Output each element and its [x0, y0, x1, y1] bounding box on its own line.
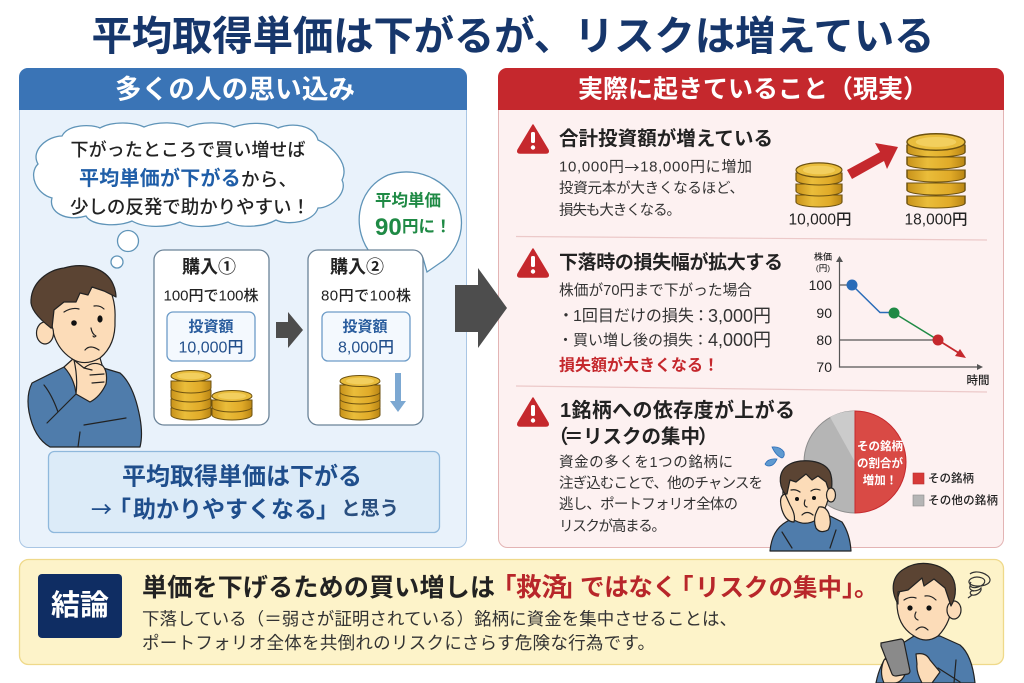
item: loss widens on decline: 損失額が大きくなる！	[559, 356, 719, 374]
conclusion heading: 「	[669, 574, 694, 602]
icon: warning triangle	[518, 125, 548, 153]
item: loss widens on decline: ：	[693, 308, 709, 324]
line chart: share price: 80	[816, 332, 832, 348]
conclusion body text: 下落している（＝弱さが証明されている）銘柄に資金を集中させることは、	[142, 609, 737, 629]
panel header: common belief: 多くの人の思い込み	[115, 74, 355, 104]
purchase 2 card: 80円で100株	[321, 288, 411, 304]
item: concentration in one stock: 逃し、ポートフォリオ全体の	[559, 496, 738, 513]
icon: worry spiral	[968, 572, 990, 598]
thought cloud: 平均単価が下がるから、	[79, 166, 297, 190]
item: loss widens on decline: ：	[693, 332, 708, 348]
conclusion heading: 「	[491, 574, 517, 602]
item: loss widens on decline: 買い増し後の損失	[573, 332, 693, 348]
item: total investment increases: 18,000円	[905, 212, 967, 228]
item: total investment increases: 10,000円→18,000円に増加	[559, 156, 752, 178]
thought cloud	[34, 123, 344, 268]
line chart: share price: 70	[816, 359, 832, 375]
conclusion heading: ではなく	[580, 574, 677, 602]
investment amount: 8,000 yen: 投資額	[342, 318, 388, 336]
line chart: share price: 100	[809, 277, 832, 293]
investment amount: 10,000 yen: 10,000円	[179, 340, 243, 356]
legend	[913, 471, 998, 507]
item: loss widens on decline	[518, 249, 990, 387]
person: thinking man	[28, 266, 142, 447]
item: loss widens on decline: ・	[558, 332, 573, 348]
conclusion badge	[38, 574, 122, 638]
speech bubble: average price 90 yen: 円に！	[402, 218, 452, 236]
conclusion body text: ポートフォリオ全体を共倒れのリスクにさらす危険な行為です。	[142, 633, 655, 653]
person: man looking at phone	[876, 563, 990, 683]
arrow: growth	[847, 143, 898, 179]
purchase 1 card	[154, 250, 269, 425]
panel header: reality	[498, 68, 1004, 110]
purchase 2 card: 購入②	[330, 257, 384, 277]
icon: warning triangle	[518, 398, 548, 426]
investment amount: 8,000 yen: 8,000円	[338, 340, 394, 356]
item: loss widens on decline: 4,000円	[708, 330, 771, 350]
conclusion heading: リスクの集中	[695, 574, 842, 602]
speech bubble: average price 90 yen	[359, 172, 461, 272]
conclusion heading	[142, 574, 878, 602]
panel: common belief	[19, 68, 467, 548]
item: concentration in one stock: ）	[698, 426, 718, 448]
line chart: share price: 時間	[966, 373, 990, 387]
item: concentration in one stock: 資金の多くを1つの銘柄に	[559, 453, 733, 471]
callout: average cost falls: 平均取得単価は下がる	[122, 462, 362, 490]
conclusion body text	[142, 609, 737, 653]
item: concentration in one stock: （	[549, 426, 569, 448]
icon: down arrow	[390, 373, 406, 412]
item: concentration in one stock: 注ぎ込むことで、他のチャンスを	[559, 475, 763, 492]
item: loss widens on decline: 3,000円	[708, 306, 771, 326]
callout: average cost falls: 助かりやすくなる	[133, 496, 317, 522]
arrow: purchase 1 to purchase 2	[276, 312, 303, 348]
item: loss widens on decline: ・	[558, 308, 574, 324]
item: concentration in one stock: 1銘柄への依存度が上がる	[560, 398, 795, 422]
investment amount: 8,000 yen	[322, 312, 410, 361]
panel: conclusion	[20, 560, 1004, 683]
purchase 2 card	[308, 250, 423, 425]
item: loss widens on decline: 株価が70円まで下がった場合	[559, 282, 752, 299]
conclusion heading: 単価を下げるための買い増しは	[142, 574, 495, 602]
item: total investment increases: 損失も大きくなる。	[559, 202, 681, 219]
conclusion heading: 」	[562, 574, 588, 602]
thought cloud: 少しの反発で助かりやすい！	[70, 196, 310, 218]
callout: average cost falls: 」	[316, 496, 339, 522]
item: concentration in one stock	[518, 398, 998, 551]
thought cloud: 下がったところで買い増せば	[70, 139, 306, 160]
speech bubble: average price 90 yen: 90	[375, 214, 402, 240]
item: loss widens on decline: 1回目だけの損失	[573, 306, 694, 324]
icon: coin stacks	[171, 370, 252, 420]
line chart: share price: 90	[816, 305, 832, 321]
item: total investment increases: 投資元本が大きくなるほど、	[559, 180, 744, 197]
callout: average cost falls: 「	[108, 496, 131, 522]
pie chart: holding share: 増加！	[863, 473, 897, 487]
icon: coin stack	[340, 376, 380, 420]
icon: warning triangle	[518, 249, 548, 277]
item: total investment increases: 10,000円	[789, 212, 851, 228]
investment amount: 10,000 yen	[167, 312, 255, 361]
line chart: share price: (円)	[816, 263, 830, 273]
person: worried man	[770, 461, 851, 551]
title: 平均取得単価は下がるが、リスクは増えている	[92, 13, 934, 59]
panel: reality	[498, 68, 1004, 551]
conclusion heading: 。	[854, 574, 878, 602]
icon: small coin stack	[796, 163, 842, 207]
callout: average cost falls	[48, 452, 440, 532]
pie chart: holding share: その銘柄	[857, 439, 903, 453]
item: concentration in one stock: リスクが高まる。	[559, 518, 666, 535]
panel header: reality: 実際に起きていること（現実）	[578, 76, 928, 104]
legend: その銘柄	[928, 471, 974, 485]
icon: large coin stack	[907, 134, 965, 208]
item: concentration in one stock: リスクの集中	[583, 426, 700, 448]
item: total investment increases: 合計投資額が増えている	[559, 127, 773, 150]
item: concentration in one stock: ＝	[564, 426, 584, 448]
speech bubble: average price 90 yen: 平均単価	[375, 191, 441, 210]
purchase 1 card: 100円で100株	[164, 288, 258, 304]
conclusion heading: 救済	[516, 574, 568, 602]
callout: average cost falls: →	[91, 494, 112, 524]
panel header: common belief	[19, 68, 467, 110]
investment amount: 10,000 yen: 投資額	[188, 318, 234, 336]
line chart: share price	[809, 251, 990, 387]
item: total investment increases	[518, 125, 967, 228]
pie chart: holding share	[804, 411, 906, 513]
callout: average cost falls: と思う	[341, 498, 399, 520]
pie chart: holding share: の割合が	[857, 456, 903, 470]
icon: sweat drops	[765, 447, 784, 466]
legend: その他の銘柄	[928, 493, 998, 507]
line chart: share price: 株価	[814, 251, 832, 262]
purchase 1 card: 購入①	[182, 257, 236, 277]
arrow: belief to reality	[455, 268, 507, 348]
conclusion heading: 」	[842, 574, 866, 602]
conclusion badge: 結論	[51, 589, 109, 622]
item: loss widens on decline: 下落時の損失幅が拡大する	[559, 250, 783, 274]
